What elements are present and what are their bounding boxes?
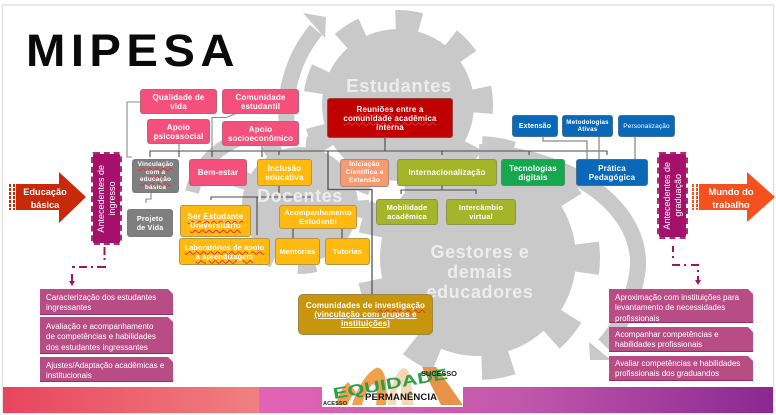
dashed link: antecedentes de graduacao <box>672 246 701 285</box>
logo: Equidade: SUCESSO <box>421 369 457 378</box>
note: Avaliacao: Avaliação e acompanhamento <box>46 322 153 331</box>
box: Projeto de Vida: Projeto <box>137 214 163 223</box>
box: Inclusao educativa <box>257 159 312 186</box>
box: Iniciacao: Iniciação <box>349 161 380 168</box>
gear label: Estudantes: Estudantes <box>346 75 452 96</box>
box: Apoio socioeconomico <box>222 121 299 146</box>
note: Acompanhar: habilidades profissionais <box>615 340 702 349</box>
box: Internacionalizacao: Internacionalização <box>408 168 486 177</box>
note: Aproximacao: profissionais <box>615 314 659 323</box>
box: Personalizacao: Personalização <box>623 122 670 130</box>
box: Reunioes: comunidade acadêmica <box>343 114 437 122</box>
note: Ajustes: Ajustes/Adaptação acadêmicas e <box>46 361 164 370</box>
box: Comunidade estudantil: estudantil <box>241 102 280 110</box>
box: Apoio psicossocial: psicossocial <box>154 132 203 140</box>
label: Mundo do trabalho: Mundo do <box>708 187 754 198</box>
box: Apoio socioeconomico: socioeconômico <box>228 134 293 142</box>
box: Comunidades de investigacao: Comunidades de investigação <box>306 301 425 310</box>
arrow: lower left cycle arc <box>192 134 258 192</box>
label: Educacao basica <box>23 187 67 210</box>
box: Pratica Pedagogica <box>576 159 648 186</box>
box: Comunidades de investigacao <box>298 294 433 335</box>
box: Qualidade de vida: vida <box>170 102 187 110</box>
note: Avaliacao <box>40 317 173 354</box>
box: Vinculacao: Vinculação <box>138 161 173 168</box>
box: Reunioes: Reuniões entre a <box>357 104 423 114</box>
note: Ajustes <box>40 357 173 382</box>
box: Qualidade de vida: Qualidade de <box>152 92 205 102</box>
arrow: Mundo do trabalho <box>693 172 775 222</box>
gear: Docentes <box>238 143 362 267</box>
box: Comunidades de investigacao: (vinculação com grupos e <box>314 310 417 319</box>
logo: Equidade <box>322 366 463 407</box>
box: Iniciacao <box>340 159 389 187</box>
box: Comunidade estudantil: Comunidade <box>236 92 285 102</box>
box: Apoio socioeconomico: Apoio <box>249 124 272 134</box>
box: Internacionalizacao <box>397 159 497 186</box>
box: Iniciacao: Extensão <box>349 177 380 184</box>
label: Educacao basica: Educação <box>23 187 67 197</box>
panel: Antecedentes de ingresso <box>91 152 122 245</box>
box: Apoio psicossocial: Apoio <box>167 122 190 132</box>
title: MIPESA <box>26 25 240 76</box>
box: Metodologias Ativas <box>562 115 613 137</box>
box: Laboratorios: Laboratórios de apoio <box>185 242 264 252</box>
box: Mobilidade academica: acadêmica <box>387 212 427 221</box>
box: Mentorias: Mentorias <box>280 247 315 256</box>
box: Vinculacao <box>132 159 179 193</box>
box: Acompanhamento Estudantil: Acompanhamento <box>284 208 352 217</box>
note: Ajustes: institucionais <box>46 371 92 380</box>
box: Tutorias <box>325 238 370 265</box>
box: Extensao <box>512 115 558 137</box>
label: Mundo do trabalho: trabalho <box>712 200 750 211</box>
box: Reunioes <box>327 98 453 138</box>
arrow: top left cycle arc <box>286 13 326 125</box>
panel: Antecedentes de graduacao <box>657 152 688 239</box>
box: Reunioes: interna <box>376 122 404 132</box>
box: Vinculacao: com a <box>146 168 165 176</box>
box: Apoio psicossocial <box>147 119 210 144</box>
panel: Antecedentes de ingresso: Antecedentes de <box>96 165 106 232</box>
box: Inclusao educativa: Inclusão <box>268 164 301 172</box>
box: Vinculacao: básica <box>145 184 166 190</box>
box: Intercambio virtual <box>446 199 516 225</box>
label: Educacao basica: básica <box>31 200 59 210</box>
note: Caracterizacao <box>40 289 173 315</box>
note: Aproximacao <box>609 289 753 323</box>
label: Mundo do trabalho <box>708 187 754 211</box>
box: Qualidade de vida <box>140 89 217 114</box>
note: Aproximacao: levantamento de necessidades <box>615 303 725 312</box>
box: Tutorias: Tutorias <box>333 247 362 256</box>
box: Iniciacao: Científica e <box>345 169 384 176</box>
note: Acompanhar: Acompanhar competências e <box>615 330 719 339</box>
bottom band: left <box>3 387 259 413</box>
box: Comunidades de investigacao: instituições) <box>341 319 390 328</box>
note: Avaliar <box>609 356 753 381</box>
note: Avaliacao: de competências e habilidades <box>46 332 156 341</box>
gear label: Docentes: Docentes <box>257 186 343 206</box>
note: Caracterizacao: Caracterização dos estudantes <box>46 293 156 302</box>
box: Metodologias Ativas: Ativas <box>578 126 597 133</box>
box: Extensao: Extensão <box>519 122 551 130</box>
box: Projeto de Vida <box>127 209 173 237</box>
logo: Equidade: PERMANÊNCIA <box>365 391 437 403</box>
arrow: right cycle arc <box>479 152 638 360</box>
box: Intercambio virtual: Intercâmbio <box>459 203 503 212</box>
note: Avaliar: Avaliar competências e habilidades <box>615 359 740 368</box>
gear label: Gestores e demais educadores: Gestores e demais educadores <box>426 242 534 302</box>
box: Laboratorios <box>179 238 270 265</box>
connector lines <box>127 102 635 294</box>
box: Comunidade estudantil <box>222 89 299 114</box>
note: Avaliacao: dos estudantes ingressantes <box>46 343 148 352</box>
box: Tecnologias digitais <box>501 159 565 186</box>
panel: Antecedentes de ingresso: ingresso <box>106 181 116 216</box>
panel: Antecedentes de graduacao: graduação <box>672 174 682 217</box>
gear: Gestores e demais educadores <box>370 150 586 366</box>
box: Bem-estar <box>189 159 247 186</box>
box: Ser Estudante Universitario: Universitário <box>190 221 241 230</box>
box: Tecnologias digitais: digitais <box>518 172 548 182</box>
box: Vinculacao: educação <box>140 176 171 183</box>
box: Acompanhamento Estudantil: Estudantil <box>299 217 337 226</box>
dashed link: antecedentes de ingresso <box>69 247 106 286</box>
bottom band: right <box>259 387 773 413</box>
box: Projeto de Vida: de Vida <box>137 223 163 232</box>
box: Pratica Pedagogica: Prática <box>598 164 626 172</box>
gear: Estudantes <box>314 21 482 189</box>
box: Mentorias <box>275 238 320 265</box>
box: Acompanhamento Estudantil <box>279 205 357 229</box>
box: Tecnologias digitais: Tecnologias <box>509 164 557 172</box>
box: Pratica Pedagogica: Pedagógica <box>589 172 635 182</box>
logo: Equidade: ACESSO <box>323 401 348 407</box>
box: Inclusao educativa: educativa <box>265 172 304 182</box>
box: Ser Estudante Universitario: Ser Estudante <box>188 212 243 221</box>
box: Intercambio virtual: virtual <box>469 212 493 221</box>
note: Aproximacao: Aproximação com instituições para <box>615 293 739 302</box>
box: Ser Estudante Universitario <box>180 205 251 237</box>
box: Mobilidade academica <box>376 199 438 225</box>
panel: Antecedentes de graduacao: Antecedentes de <box>662 162 672 229</box>
note: Acompanhar <box>609 327 753 352</box>
arrow: Educacao basica <box>10 172 86 223</box>
box: Laboratorios: a aprendizagem <box>196 252 253 260</box>
note: Caracterizacao: ingressantes <box>46 303 91 312</box>
logo: Equidade: EQUIDADE <box>332 366 449 403</box>
note: Avaliar: profissionais dos graduandos <box>615 369 719 378</box>
box: Metodologias Ativas: Metodologias <box>566 118 609 126</box>
box: Mobilidade academica: Mobilidade <box>387 203 427 212</box>
box: Personalizacao <box>618 115 675 137</box>
box: Bem-estar: Bem-estar <box>198 168 238 177</box>
